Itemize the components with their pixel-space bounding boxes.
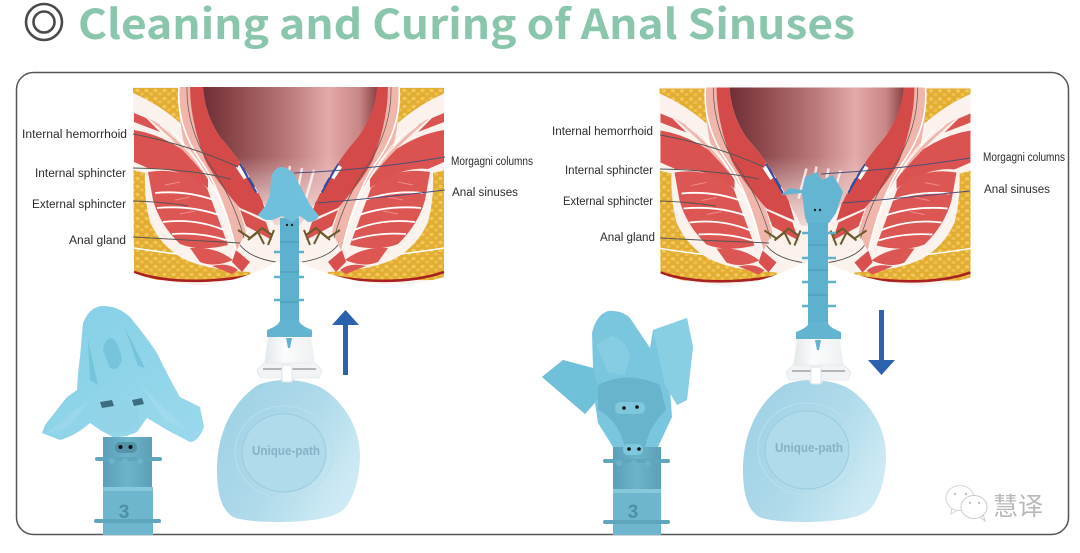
right enlarged device head: 3 [628, 502, 638, 523]
left inserted device stem and head [258, 167, 319, 324]
right anatomy labels: Anal sinuses [984, 184, 1050, 196]
right anatomy labels: Morgagni columns [983, 152, 1065, 164]
right leader lines [660, 135, 970, 243]
down arrow [868, 310, 895, 375]
left anatomy labels: Morgagni columns [451, 156, 533, 168]
left anatomy labels: External sphincter [32, 199, 126, 211]
left enlarged device head: 3 [119, 502, 129, 523]
right anatomy labels [552, 126, 1065, 244]
watermark: 慧译 [993, 493, 1043, 521]
left bottle [217, 320, 360, 522]
title icon: double ring [26, 4, 62, 40]
left enlarged device head [42, 306, 204, 535]
left anatomy labels: Anal sinuses [452, 187, 518, 199]
left anatomy labels [22, 129, 533, 247]
left anatomy labels: Internal hemorrhoid [22, 129, 127, 141]
up arrow [332, 310, 359, 375]
watermark [946, 486, 1043, 521]
right anatomy labels: Internal hemorrhoid [552, 126, 653, 138]
panel: right anatomy diagram [660, 88, 972, 288]
left leader lines [133, 134, 445, 243]
left anatomy labels: Anal gland [69, 235, 126, 247]
panel: left anatomy diagram [133, 87, 445, 287]
right inserted device stem and head [781, 172, 843, 327]
right bottle [743, 322, 886, 522]
right anatomy labels: External sphincter [563, 196, 653, 208]
right anatomy labels: Anal gland [600, 232, 655, 244]
right anatomy labels: Internal sphincter [565, 165, 653, 177]
right enlarged device head [542, 311, 693, 535]
left anatomy labels: Internal sphincter [35, 168, 126, 180]
